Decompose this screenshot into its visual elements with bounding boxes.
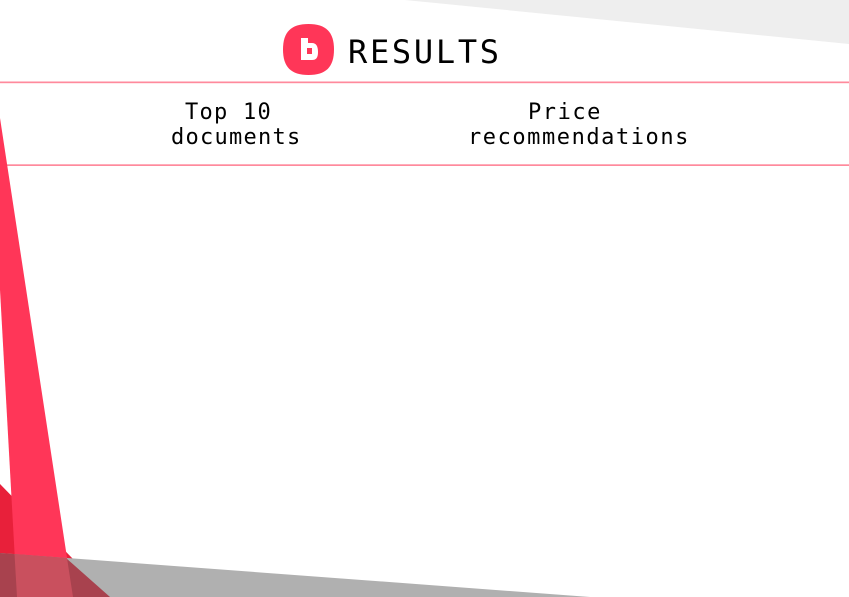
title: RESULTS [348, 33, 502, 71]
column heading: top documents: Top 10 [185, 100, 272, 125]
column heading: price recommendations: Price [528, 100, 602, 125]
column heading: top documents: documents [171, 125, 301, 150]
icon: logo badge [283, 24, 334, 75]
column heading: price recommendations [468, 100, 690, 150]
column heading: price recommendations: recommendations [468, 125, 690, 150]
column heading: top documents [171, 100, 301, 150]
